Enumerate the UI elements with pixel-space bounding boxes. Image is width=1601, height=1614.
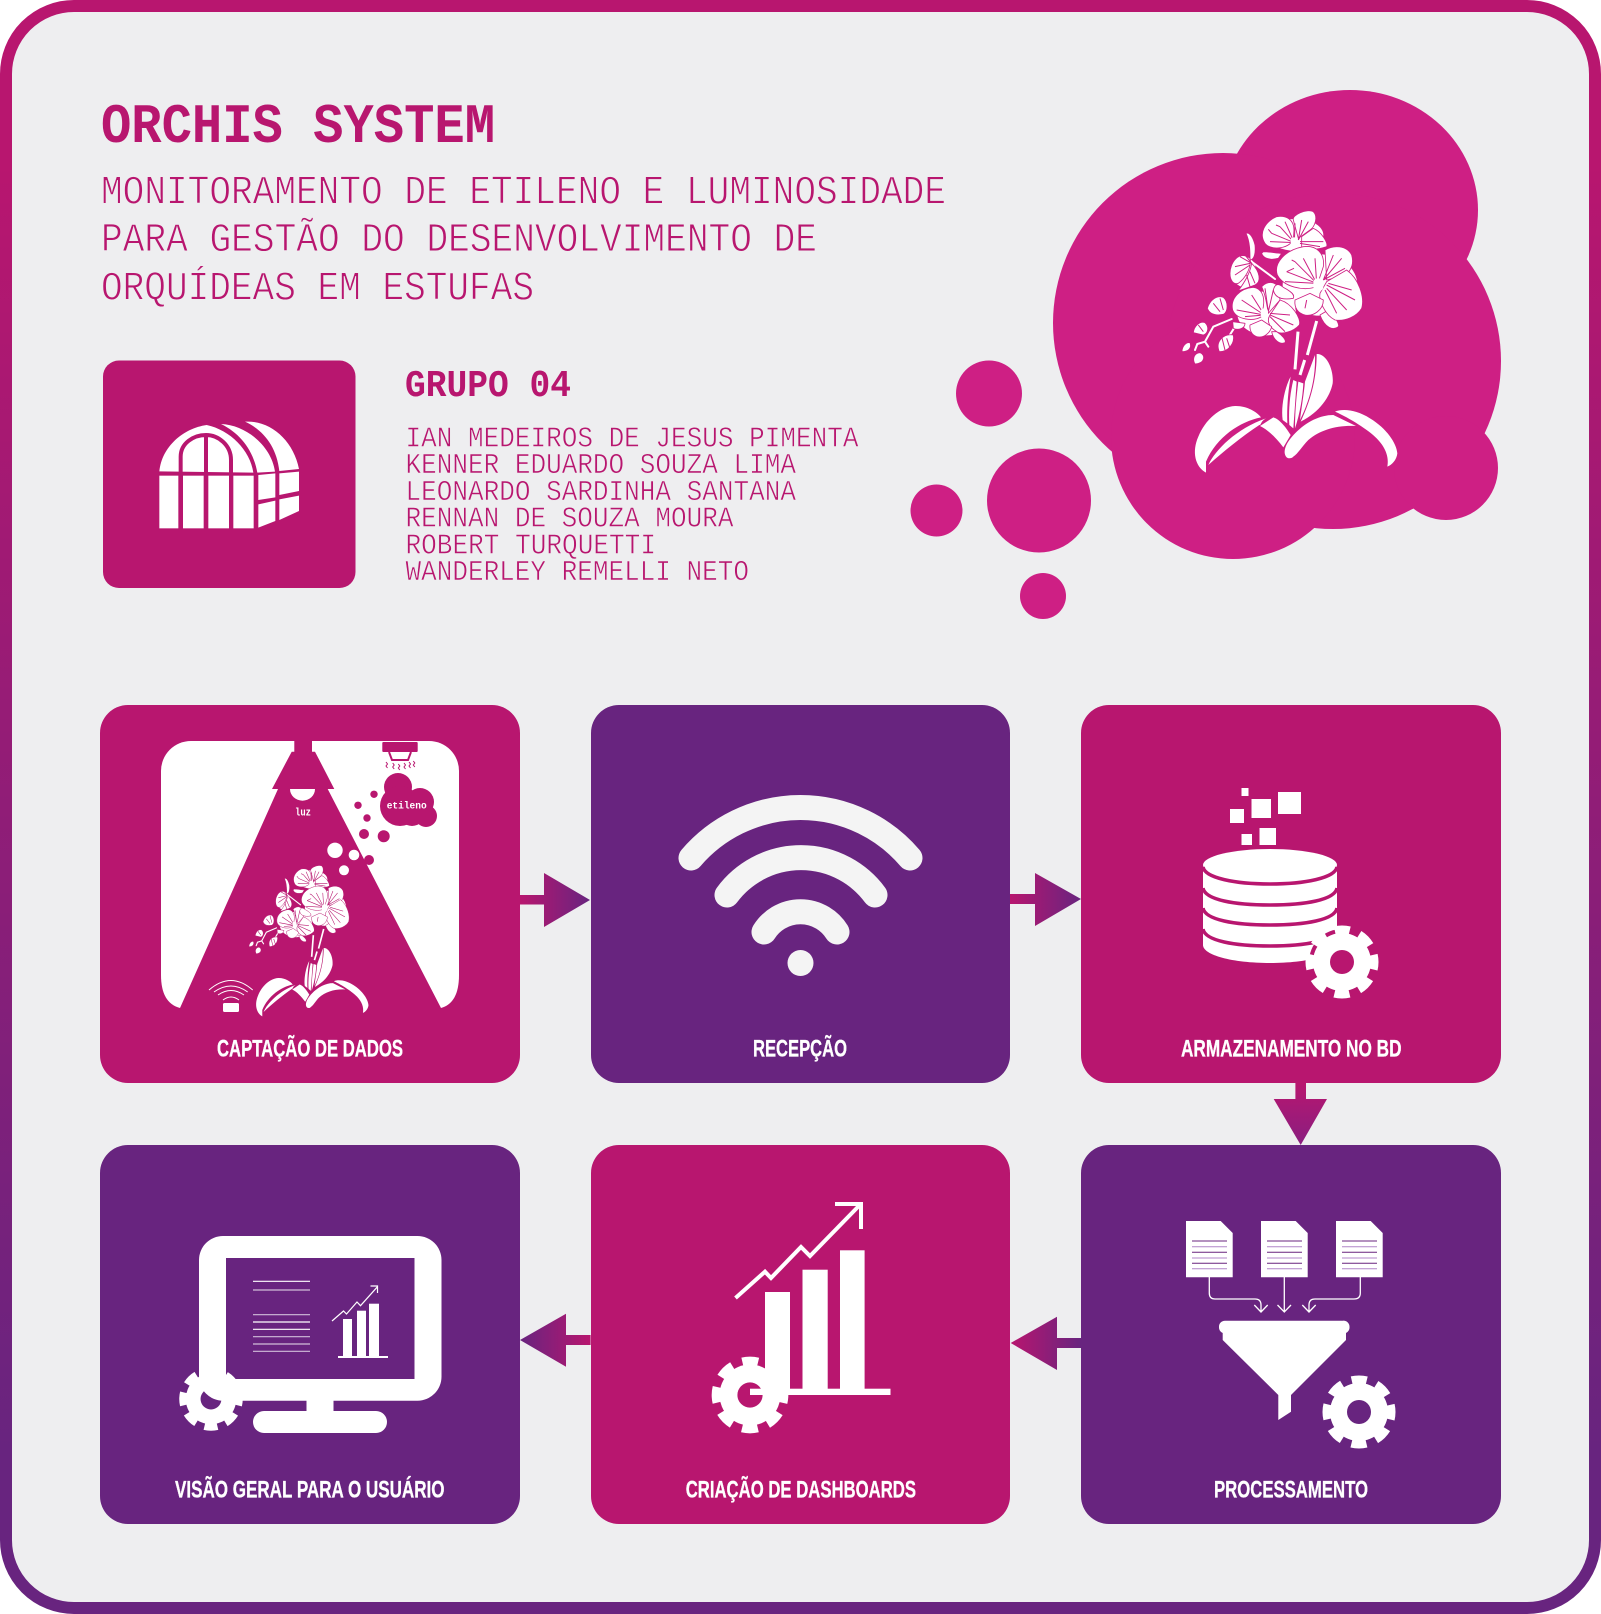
icon: gear: [716, 1361, 784, 1429]
screen mini chart: [332, 1286, 388, 1358]
illustration: light and ethylene over orchid: etileno: [387, 801, 427, 813]
illustration: light and ethylene over orchid: [161, 740, 459, 1016]
icon: orchid: [1182, 211, 1397, 473]
panel: processamento: [1081, 1145, 1501, 1524]
panel: visão geral: [100, 1145, 520, 1524]
panel: recepção: [591, 705, 1010, 1083]
team members list: LEONARDO SARDINHA SANTANA: [406, 476, 797, 509]
team members list: RENNAN DE SOUZA MOURA: [406, 502, 734, 536]
icon: monitor: [199, 1236, 442, 1433]
label: VISÃO GERAL PARA O USUÁRIO: [175, 1476, 444, 1504]
label: CAPTAÇÃO DE DADOS: [217, 1035, 403, 1063]
subtitle: MONITORAMENTO DE ETILENO E LUMINOSIDADE: [101, 170, 946, 216]
team members list: IAN MEDEIROS DE JESUS PIMENTA: [406, 422, 859, 456]
group heading: GRUPO 04: [405, 365, 571, 408]
subtitle: PARA GESTÃO DO DESENVOLVIMENTO DE: [101, 217, 817, 264]
team members list: ROBERT TURQUETTI: [406, 529, 656, 562]
panel: armazenamento no BD: [1081, 705, 1501, 1083]
icon: gear: [1327, 1380, 1391, 1444]
icon: gear: [183, 1371, 239, 1427]
screen text lines: [253, 1281, 310, 1351]
thought bubble dots: [910, 360, 1091, 619]
label: CRIAÇÃO DE DASHBOARDS: [686, 1476, 916, 1504]
panel: captação de dados: [100, 705, 520, 1083]
arrow: dashboards to visão geral: [520, 1314, 591, 1367]
icon: database: [1203, 849, 1337, 963]
icon: data squares: [1230, 788, 1301, 845]
arrow: processamento to dashboards: [1011, 1317, 1081, 1370]
subtitle: [101, 170, 946, 312]
label: RECEPÇÃO: [753, 1035, 847, 1063]
team members list: KENNER EDUARDO SOUZA LIMA: [406, 449, 797, 482]
label: PROCESSAMENTO: [1214, 1477, 1368, 1504]
icon: bar chart with arrow: [736, 1204, 890, 1395]
title: ORCHIS SYSTEM: [101, 95, 495, 159]
label: ARMAZENAMENTO NO BD: [1181, 1036, 1402, 1063]
icon: greenhouse: [159, 422, 299, 528]
subtitle: ORQUÍDEAS EM ESTUFAS: [101, 266, 534, 312]
illustration: light and ethylene over orchid: luz: [295, 808, 311, 820]
arrow: recepção to armazenamento: [1010, 873, 1081, 926]
panel: greenhouse icon box: [103, 360, 356, 588]
team members list: WANDERLEY REMELLI NETO: [406, 556, 749, 589]
thought cloud: [1053, 90, 1501, 559]
arrow: captação to recepção: [520, 873, 590, 927]
team members list: [406, 422, 859, 589]
icon: gear: [1310, 930, 1374, 994]
icon: documents: [1186, 1221, 1383, 1277]
icon: funnel: [1219, 1321, 1350, 1420]
icon: connector arrows: [1209, 1277, 1360, 1312]
arrow: armazenamento to processamento: [1274, 1083, 1327, 1145]
panel: criação de dashboards: [591, 1145, 1010, 1524]
icon: wifi: [691, 808, 910, 976]
